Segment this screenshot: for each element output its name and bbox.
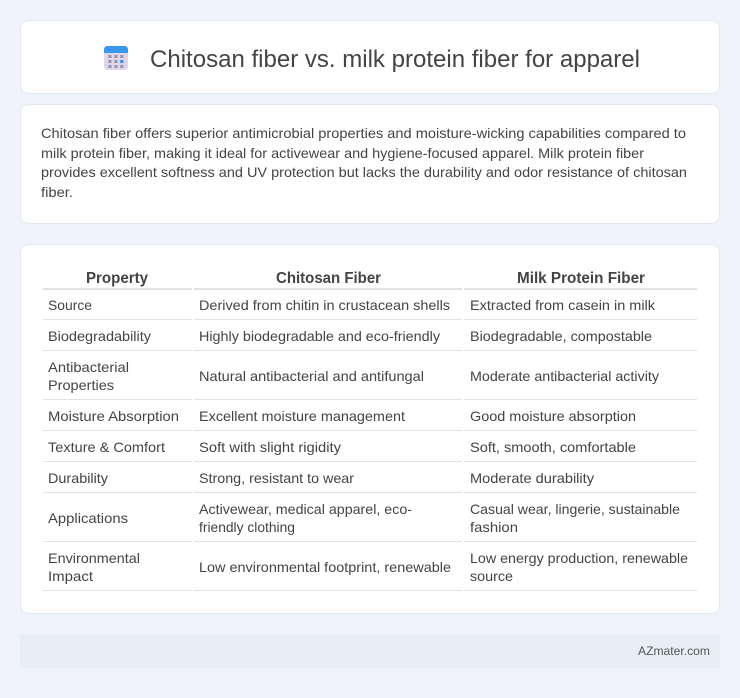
row: source [48, 297, 656, 313]
text block: summary paragraph: milk protein fiber, making it ideal for activewear and hygiene-focused apparel. Milk protein fiber [41, 145, 644, 161]
row: antibacterial properties: Antibacterial [48, 359, 129, 375]
row: biodegradability: Highly biodegradable and eco-friendly [199, 328, 440, 344]
row: biodegradability: Biodegradability [48, 328, 151, 344]
footer credit: AZmater.com [638, 644, 710, 658]
row: durability: Moderate durability [470, 470, 594, 486]
icon: calendar [104, 46, 128, 70]
row: antibacterial properties [48, 359, 659, 393]
row: source: Extracted from casein in milk [470, 297, 656, 313]
row: applications: friendly clothing [199, 519, 295, 535]
row: source: Derived from chitin in crustacean shells [199, 297, 450, 313]
table header: Chitosan Fiber [276, 270, 381, 287]
row: moisture absorption: Excellent moisture management [199, 408, 405, 424]
row: applications [48, 501, 680, 535]
panel: title card [20, 20, 720, 94]
row: environmental impact: Environmental [48, 550, 140, 566]
table header [86, 270, 645, 287]
row: environmental impact: Impact [48, 568, 93, 584]
row: moisture absorption: Moisture Absorption [48, 408, 179, 424]
footer [20, 634, 720, 668]
text block: summary paragraph: fiber. [41, 184, 73, 200]
row: antibacterial properties: Moderate antibacterial activity [470, 368, 659, 384]
row: source: Source [48, 297, 92, 313]
row: texture and comfort: Soft, smooth, comfortable [470, 439, 636, 455]
table header: Property [86, 270, 148, 287]
panel: summary [20, 104, 720, 224]
panel: comparison table [20, 244, 720, 614]
row: durability [48, 470, 594, 486]
row: applications: fashion [470, 519, 518, 535]
row: applications: Casual wear, lingerie, sustainable [470, 501, 680, 517]
text block: summary paragraph: Chitosan fiber offers superior antimicrobial properties and moisture-wicking capabilities compared to [41, 125, 686, 141]
text block: summary paragraph [41, 125, 687, 200]
row: durability: Durability [48, 470, 108, 486]
row: applications: Activewear, medical apparel, eco- [199, 501, 412, 517]
row: durability: Strong, resistant to wear [199, 470, 354, 486]
title: Chitosan fiber vs. milk protein fiber for apparel [150, 46, 640, 73]
row: texture and comfort: Soft with slight rigidity [199, 439, 341, 455]
table header: Milk Protein Fiber [517, 270, 645, 287]
row: environmental impact: Low energy production, renewable [470, 550, 688, 566]
row: texture and comfort [48, 439, 636, 455]
row: applications: Applications [48, 510, 128, 526]
text block: summary paragraph: provides excellent softness and UV protection but lacks the durability and odor resistance of chitosan [41, 164, 687, 180]
row: texture and comfort: Texture & Comfort [48, 439, 165, 455]
row: biodegradability: Biodegradable, compostable [470, 328, 652, 344]
row: antibacterial properties: Properties [48, 377, 114, 393]
row: antibacterial properties: Natural antibacterial and antifungal [199, 368, 424, 384]
row: environmental impact [48, 550, 688, 584]
row: environmental impact: Low environmental footprint, renewable [199, 559, 451, 575]
row: moisture absorption [48, 408, 636, 424]
row: biodegradability [48, 328, 652, 344]
row: moisture absorption: Good moisture absorption [470, 408, 636, 424]
row: environmental impact: source [470, 568, 513, 584]
